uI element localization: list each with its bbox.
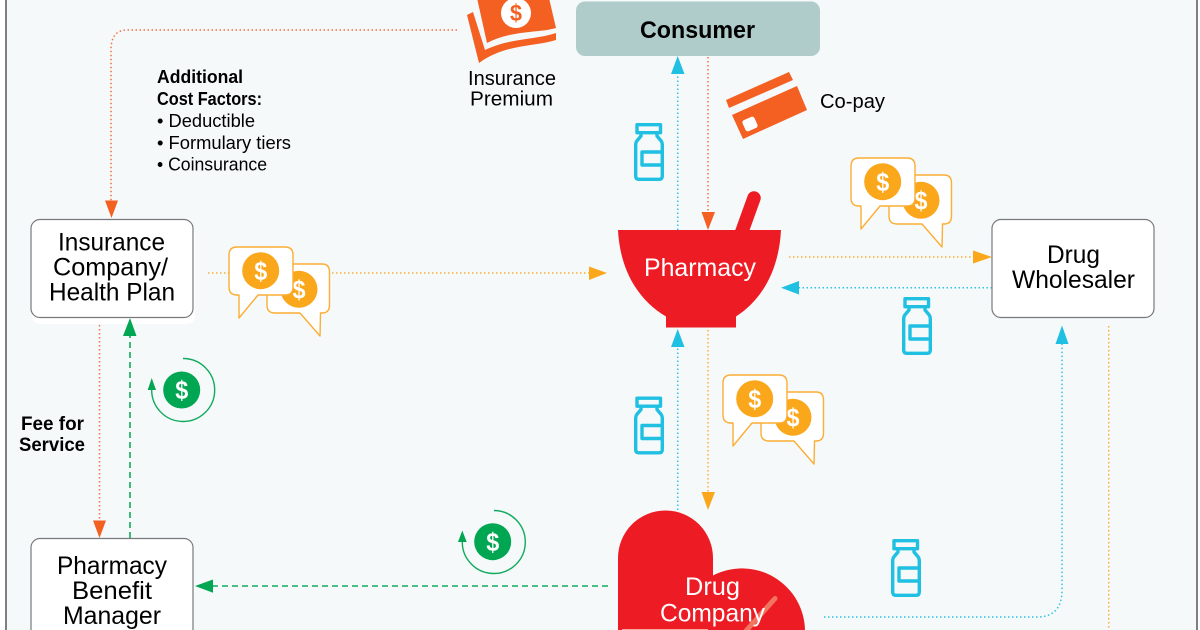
icon: rebate cycle drug company <box>458 510 525 573</box>
icon: payment speech bubbles wholesaler: $ <box>914 186 928 216</box>
icon: insurance premium banknotes <box>467 0 556 63</box>
drug wholesaler box: Drug <box>1047 241 1100 269</box>
insurance company box <box>31 220 193 318</box>
label: insurance premium <box>468 68 556 110</box>
consumer box <box>576 2 820 56</box>
arrow: wholesaler to pharmacy (drugs) <box>781 281 992 294</box>
label: co-pay: Co-pay <box>820 91 885 113</box>
icon: rebate cycle insurance: $ <box>175 375 189 405</box>
drug company mortar shape <box>618 511 805 630</box>
arrow: drug company to pharmacy (drugs) <box>671 329 684 510</box>
icon: payment speech bubbles insurance: $ <box>254 256 268 286</box>
icon: payment speech bubbles insurance: $ <box>292 274 306 304</box>
insurance company box: Company/ <box>53 254 168 282</box>
icon: payment speech bubbles wholesaler <box>851 158 952 247</box>
icon: drug bottle consumer <box>636 125 662 179</box>
icon: drug bottle pharmacy supply <box>636 398 662 453</box>
pharmacy benefit manager box <box>31 538 193 630</box>
label: insurance premium: Insurance <box>468 68 556 90</box>
icon: rebate cycle insurance <box>148 358 215 421</box>
insurance company box: Insurance <box>58 228 165 256</box>
text block: additional cost factors: • Coinsurance <box>157 154 267 174</box>
label: fee for service <box>19 414 85 456</box>
arrow: pharmacy to wholesaler (payment) <box>789 250 992 264</box>
arrow: pharmacy benefit manager to insurance company (rebate) <box>123 318 136 538</box>
drug company mortar shape: Drug <box>685 573 740 601</box>
drug wholesaler box <box>992 220 1154 318</box>
icon: drug bottle drug company <box>893 541 919 595</box>
drug company mortar shape: Company <box>660 600 765 628</box>
icon: payment speech bubbles drug company: $ <box>786 402 800 432</box>
icon: credit card <box>726 72 807 139</box>
icon: payment speech bubbles insurance <box>229 247 330 336</box>
pharmacy benefit manager box: Pharmacy <box>57 552 167 580</box>
icon: drug bottle wholesaler <box>904 299 930 353</box>
arrow: insurance company to pharmacy (payment) <box>208 266 607 280</box>
arrow: drug company to wholesaler (drugs) <box>824 326 1068 617</box>
text block: additional cost factors: Cost Factors: <box>157 89 262 109</box>
label: fee for service: Service <box>19 435 85 456</box>
pharmacy benefit manager box: Manager <box>63 602 161 630</box>
label: fee for service: Fee for <box>21 414 85 435</box>
arrow: pharmacy to consumer (drugs) <box>671 56 684 230</box>
text block: additional cost factors: • Deductible <box>157 111 255 131</box>
icon: payment speech bubbles wholesaler: $ <box>876 167 890 197</box>
arrow: consumer to pharmacy (co-pay) <box>702 57 715 230</box>
icon: payment speech bubbles drug company <box>723 375 824 464</box>
text block: additional cost factors: • Formulary tiers <box>157 133 291 153</box>
arrow: wholesaler to drug company (payment) <box>1108 326 1110 630</box>
icon: rebate cycle drug company: $ <box>486 527 500 557</box>
arrow: pharmacy to drug company (payment) <box>702 330 715 510</box>
label: insurance premium: Premium <box>470 88 553 110</box>
insurance company box: Health Plan <box>49 278 175 306</box>
pharmacy benefit manager box: Benefit <box>72 577 152 605</box>
arrow: insurance premium to insurance company <box>105 30 457 218</box>
text block: additional cost factors: Additional <box>157 67 243 87</box>
text block: additional cost factors <box>157 67 291 174</box>
arrow: insurance company to pharmacy benefit manager (fee) <box>93 325 106 538</box>
drug wholesaler box: Wholesaler <box>1012 266 1135 294</box>
arrow: drug company to pharmacy benefit manager (rebate) <box>195 580 608 593</box>
insurance box halo <box>32 225 195 324</box>
pharmacy mortar and pestle <box>618 198 781 328</box>
consumer box: Consumer <box>640 17 755 44</box>
pharmacy mortar and pestle: Pharmacy <box>644 254 756 282</box>
icon: payment speech bubbles drug company: $ <box>748 384 762 414</box>
icon: insurance premium banknotes: $ <box>510 0 522 26</box>
